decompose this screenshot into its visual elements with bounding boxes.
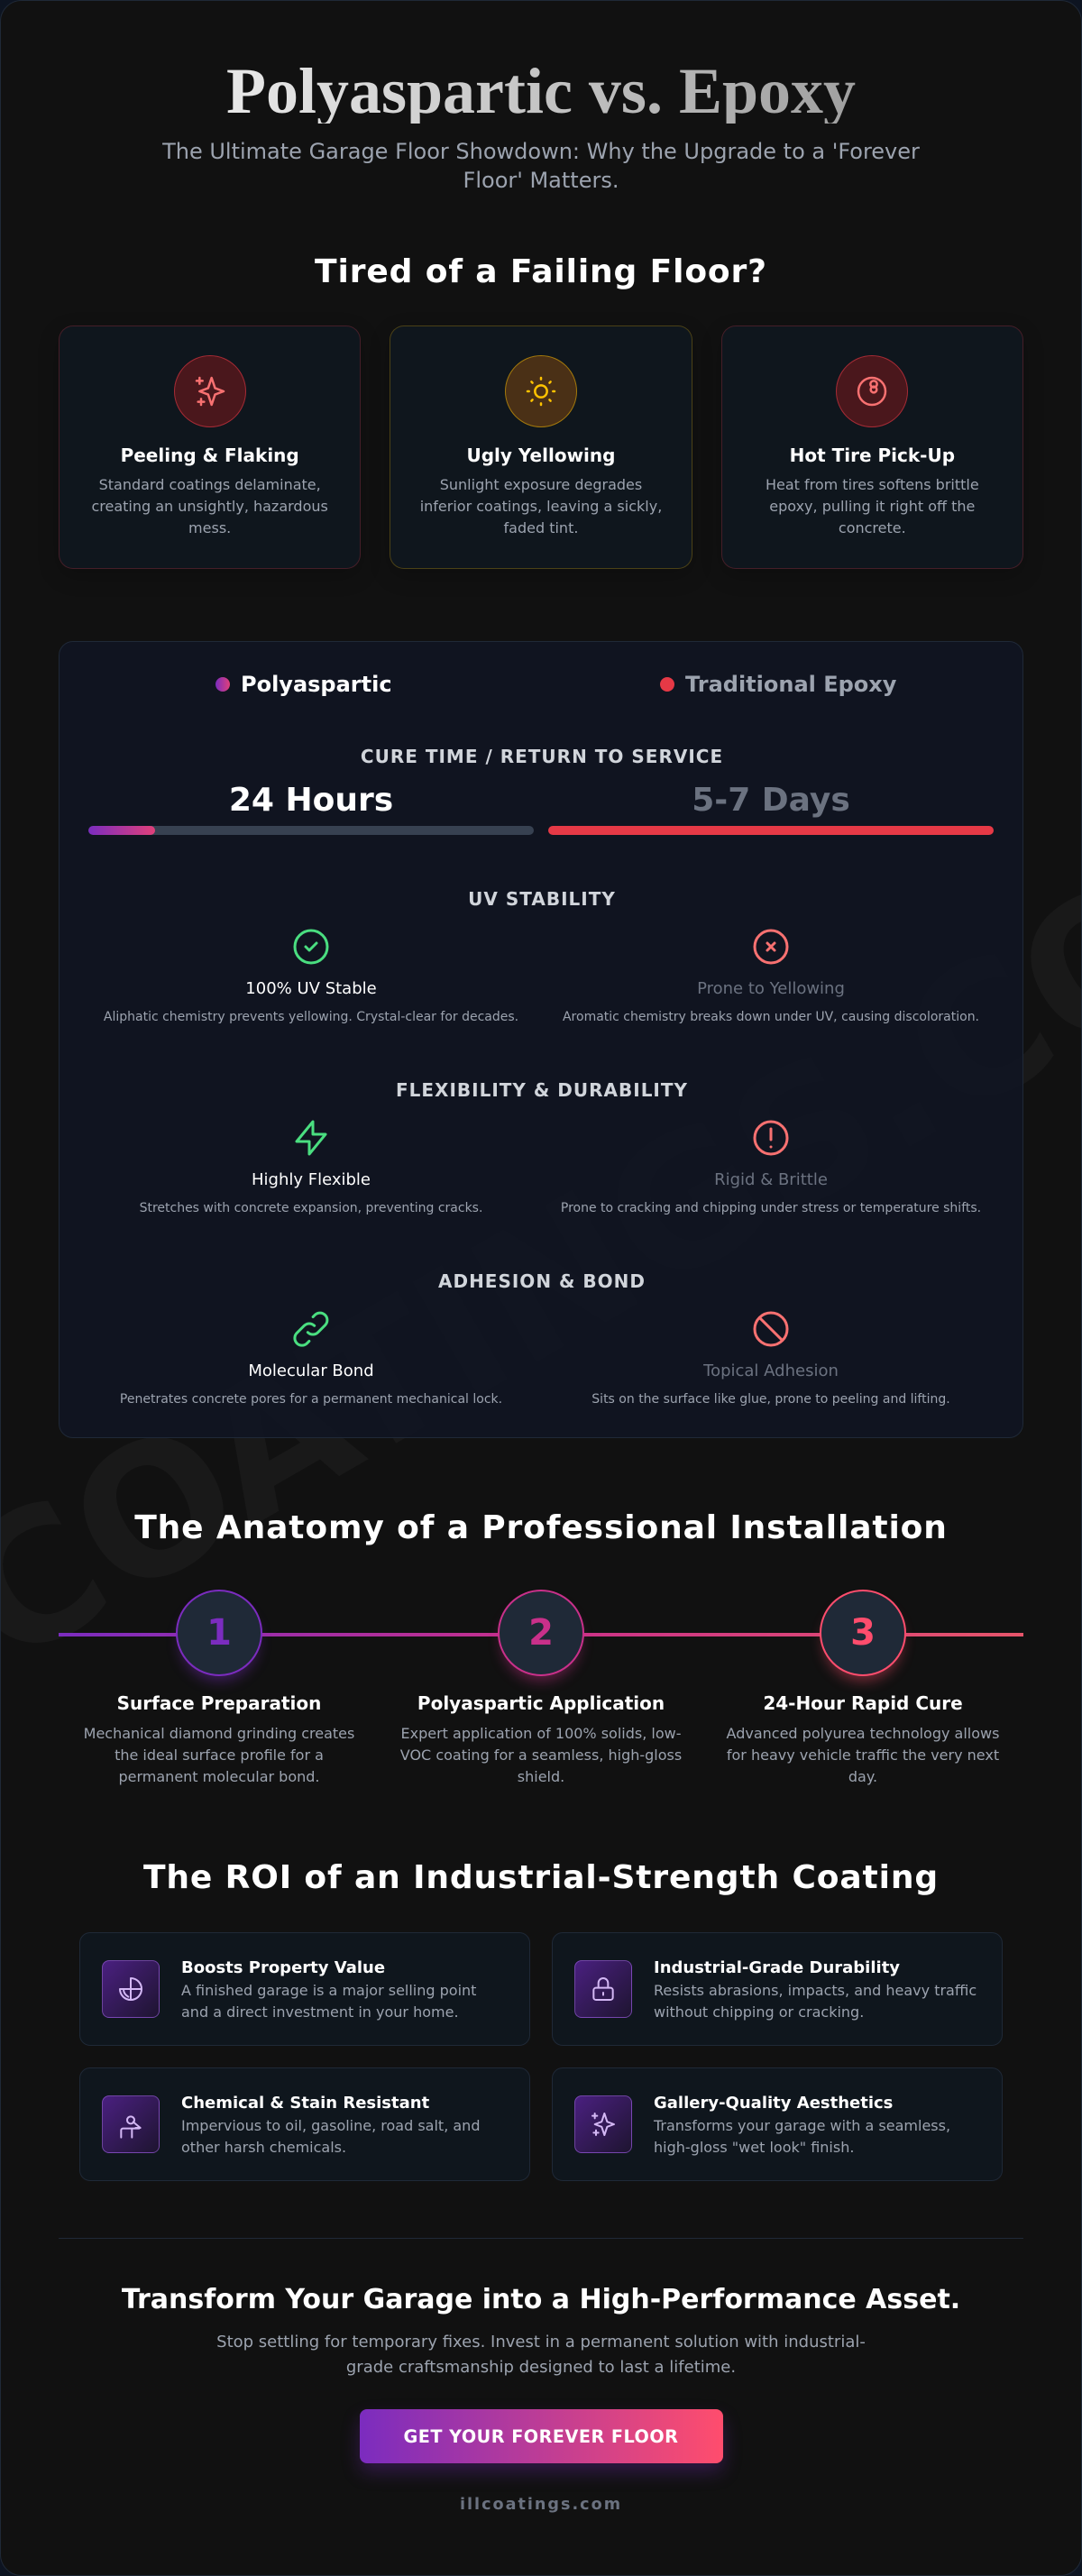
text: Transforms your garage with a seamless, <box>654 2117 950 2134</box>
card text <box>91 476 328 536</box>
title: Industrial-Grade Durability <box>654 1958 900 1977</box>
card text: Standard coatings delaminate, <box>99 476 321 493</box>
icon: sun <box>505 355 577 427</box>
panel: chemical resistant <box>79 2067 530 2181</box>
cta button <box>359 2409 723 2463</box>
icon: sparkles <box>574 2095 632 2153</box>
legend: traditional epoxy <box>660 672 896 697</box>
icon: link <box>293 1311 328 1347</box>
step 3 text: Advanced polyurea technology allows <box>727 1725 999 1742</box>
legend text: Traditional Epoxy <box>685 672 896 697</box>
cta text <box>216 2333 866 2377</box>
title: Chemical & Stain Resistant <box>181 2094 429 2113</box>
label: topical adhesion: Topical Adhesion <box>703 1361 839 1380</box>
text: without chipping or cracking. <box>654 2003 864 2021</box>
cta button: GET YOUR FOREVER FLOOR <box>404 2425 678 2447</box>
row label: uv stability: UV STABILITY <box>468 888 616 910</box>
label: rigid and brittle: Rigid & Brittle <box>714 1170 828 1189</box>
icon: check circle <box>294 929 328 965</box>
bar: epoxy cure time <box>548 826 994 835</box>
step 2 title: Polyaspartic Application <box>417 1692 665 1714</box>
card text <box>420 476 662 536</box>
text: and a direct investment in your home. <box>181 2003 459 2021</box>
card text: Heat from tires softens brittle <box>766 476 979 493</box>
text <box>653 2117 950 2156</box>
value: 5-7 days: 5-7 Days <box>692 782 850 819</box>
card text: inferior coatings, leaving a sickly, <box>420 498 662 515</box>
step 1 title: Surface Preparation <box>117 1692 321 1714</box>
step 1 text: Mechanical diamond grinding creates <box>84 1725 354 1742</box>
heading: tired of a failing floor: Tired of a Failing Floor? <box>315 253 767 290</box>
title: Polyaspartic vs. Epoxy <box>226 55 856 127</box>
text <box>654 1982 977 2021</box>
panel: ugly yellowing <box>390 325 692 569</box>
subtitle <box>162 139 920 193</box>
icon: ban <box>754 1311 788 1347</box>
text <box>181 1982 476 2021</box>
step 1 number: 1 <box>206 1612 232 1654</box>
icon: tire <box>836 355 908 427</box>
step 3 number <box>820 1590 906 1676</box>
legend dot <box>660 677 674 692</box>
card text: faded tint. <box>504 519 578 536</box>
card title: Ugly Yellowing <box>467 445 615 466</box>
text: A finished garage is a major selling point <box>181 1982 476 1999</box>
step 2 text: Expert application of 100% solids, low- <box>401 1725 681 1742</box>
heading: roi: The ROI of an Industrial-Strength Coating <box>143 1859 939 1896</box>
subtitle: The Ultimate Garage Floor Showdown: Why the Upgrade to a 'Forever <box>162 139 920 164</box>
icon: x circle <box>754 929 788 965</box>
text: high-gloss "wet look" finish. <box>654 2139 854 2156</box>
subtitle: Floor' Matters. <box>463 168 619 193</box>
title: Gallery-Quality Aesthetics <box>654 2094 893 2113</box>
step 3 text: day. <box>848 1768 877 1785</box>
text: penetrates: Penetrates concrete pores for a permanent mechanical lock. <box>120 1392 502 1407</box>
step 2 text: shield. <box>518 1768 564 1785</box>
step 2 text <box>400 1725 682 1785</box>
row label: flexibility: FLEXIBILITY & DURABILITY <box>396 1079 688 1101</box>
card text: epoxy, pulling it right off the <box>769 498 975 515</box>
step 3 text <box>727 1725 999 1785</box>
text: sits on surface: Sits on the surface like glue, prone to peeling and lifting. <box>591 1392 950 1407</box>
bar: polyaspartic cure time <box>88 826 534 835</box>
text: aromatic: Aromatic chemistry breaks down under UV, causing discoloration. <box>563 1010 979 1024</box>
label: highly flexible: Highly Flexible <box>252 1170 371 1189</box>
text: other harsh chemicals. <box>181 2139 346 2156</box>
step 3 text: for heavy vehicle traffic the very next <box>727 1746 999 1764</box>
text: Impervious to oil, gasoline, road salt, and <box>181 2117 480 2134</box>
bar fill 15% <box>88 826 155 835</box>
step 3 number: 3 <box>850 1612 876 1654</box>
value: 24 hours: 24 Hours <box>229 782 393 819</box>
step 1 number <box>176 1590 262 1676</box>
icon: lock <box>574 1960 632 2018</box>
icon: lightning <box>295 1120 327 1156</box>
icon: figure <box>102 2095 160 2153</box>
legend dot <box>215 677 230 692</box>
step 1 text: permanent molecular bond. <box>118 1768 320 1785</box>
row label: adhesion: ADHESION & BOND <box>438 1270 646 1292</box>
text <box>181 2117 480 2156</box>
card title: Peeling & Flaking <box>121 445 299 466</box>
title: Boosts Property Value <box>181 1958 385 1977</box>
card text <box>766 476 979 536</box>
panel: aesthetics <box>552 2067 1003 2181</box>
cta text: Stop settling for temporary fixes. Invest in a permanent solution with industrial- <box>216 2333 866 2351</box>
card text: Sunlight exposure degrades <box>440 476 642 493</box>
label: 100% uv stable: 100% UV Stable <box>245 979 377 998</box>
step 2 text: VOC coating for a seamless, high-gloss <box>400 1746 682 1764</box>
step 1 text: the ideal surface profile for a <box>115 1746 324 1764</box>
legend: polyaspartic <box>215 672 392 697</box>
step 2 number: 2 <box>528 1612 554 1654</box>
step 3 title: 24-Hour Rapid Cure <box>763 1692 963 1714</box>
cta heading: Transform Your Garage into a High-Performance Asset. <box>122 2284 960 2315</box>
text: prone to cracking: Prone to cracking and chipping under stress or temperature shifts. <box>561 1201 981 1215</box>
card text: mess. <box>188 519 231 536</box>
timeline line <box>59 1633 1023 1636</box>
label: molecular bond: Molecular Bond <box>248 1361 374 1380</box>
label: prone to yellowing: Prone to Yellowing <box>697 979 845 998</box>
icon: sparkles <box>174 355 246 427</box>
text: Resists abrasions, impacts, and heavy traffic <box>654 1982 977 1999</box>
heading: anatomy: The Anatomy of a Professional Installation <box>134 1509 948 1546</box>
panel: comparison <box>59 641 1023 1438</box>
icon: exclamation circle <box>754 1120 788 1156</box>
step 2 number <box>498 1590 584 1676</box>
row label: cure time: CURE TIME / RETURN TO SERVICE <box>361 746 723 767</box>
cta text: grade craftsmanship designed to last a lifetime. <box>346 2358 736 2377</box>
card title: Hot Tire Pick-Up <box>790 445 955 466</box>
text: stretches: Stretches with concrete expansion, preventing cracks. <box>140 1201 482 1215</box>
panel: durability <box>552 1932 1003 2046</box>
icon: pie chart <box>102 1960 160 2018</box>
card text: creating an unsightly, hazardous <box>91 498 328 515</box>
legend text: Polyaspartic <box>241 672 392 697</box>
panel: peeling and flaking <box>59 325 361 569</box>
text: aliphatic: Aliphatic chemistry prevents yellowing. Crystal-clear for decades. <box>104 1010 518 1024</box>
panel: property value <box>79 1932 530 2046</box>
website: illcoatings.com <box>460 2496 622 2514</box>
card text: concrete. <box>839 519 906 536</box>
panel: hot tire pick-up <box>721 325 1023 569</box>
step 1 text <box>84 1725 354 1785</box>
